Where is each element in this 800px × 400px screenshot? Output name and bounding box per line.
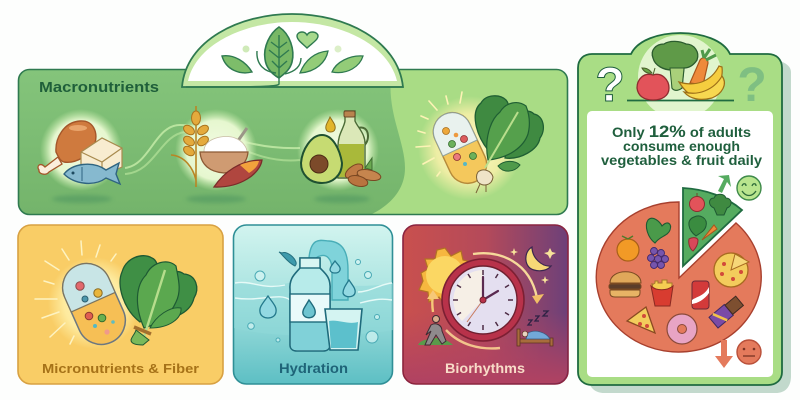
icon: moon and stars [510,247,556,284]
pie: remaining 88 percent [596,202,761,352]
chart: pie of daily food intake [596,175,761,368]
icon: heart [297,32,318,48]
icon: pizza slice [627,307,655,333]
icon: bed and sleep [517,311,553,346]
icon: burger [609,272,641,297]
icon: fries [651,280,673,306]
arrow: evening path [473,253,537,298]
headline: statistic: Only 12% of adults [612,122,751,141]
icon: right leaves [300,51,363,73]
icon: spinach bunch [120,256,197,345]
icon: tap stream [309,240,348,300]
panel: biorhythms [403,225,568,384]
icon group: healthy fat foods [297,109,382,203]
arrow: up [718,175,731,193]
icon: water drops [260,261,355,318]
icon: spinach [689,216,706,236]
label: micronutrients and fiber: Micronutrients & Fiber [42,361,199,376]
panel: micronutrients and fiber [18,225,223,384]
headline: statistic: consume enough [623,139,740,154]
panel: hydration [234,225,393,384]
icon group: carbohydrate foods [171,106,262,203]
icon: apple [690,193,704,212]
icon: water bottle [279,252,330,351]
icon: sun [419,248,476,305]
header dome: leaf emblem [182,14,403,87]
icon: capsule [55,256,133,352]
icon: question mark white: ? [595,59,625,112]
icon: walking person [418,316,453,345]
icon group: capsule and leafy greens [416,92,543,200]
icon: donut [667,314,697,344]
icon: soda can [692,281,709,309]
icon: clock [442,259,524,341]
icon: carrot [702,225,717,240]
icon group: protein foods [38,109,122,203]
icon: neutral face [737,340,761,364]
heading: macronutrients: Macronutrients [39,80,159,96]
icon: glass of water [325,309,362,350]
icon: strawberry [689,238,698,251]
icon: bubbles [248,260,380,343]
arrow: morning path [431,295,434,312]
icon: spinach [646,218,671,243]
icon: question mark green: ? [737,59,767,112]
icon: grapes [648,248,668,268]
panel: macronutrients [18,70,568,214]
panel: vegetable and fruit statistic [578,33,791,393]
icon: broccoli [710,194,731,215]
icon: pizza [714,253,749,287]
icon: left leaf [222,56,252,73]
icon: orange [617,236,639,261]
headline: statistic: vegetables & fruit daily [601,153,763,168]
icon: smiley [737,176,761,200]
pie: 12 percent slice [683,188,742,266]
label: biorhythms: Biorhythms [445,361,525,376]
headline: statistic [601,122,763,168]
icon: chocolate bar [709,295,744,328]
arrow: down [715,340,733,368]
icon: central leaf [200,27,301,87]
label: hydration: Hydration [279,361,348,376]
icon group: fruit and vegetables [627,41,734,100]
